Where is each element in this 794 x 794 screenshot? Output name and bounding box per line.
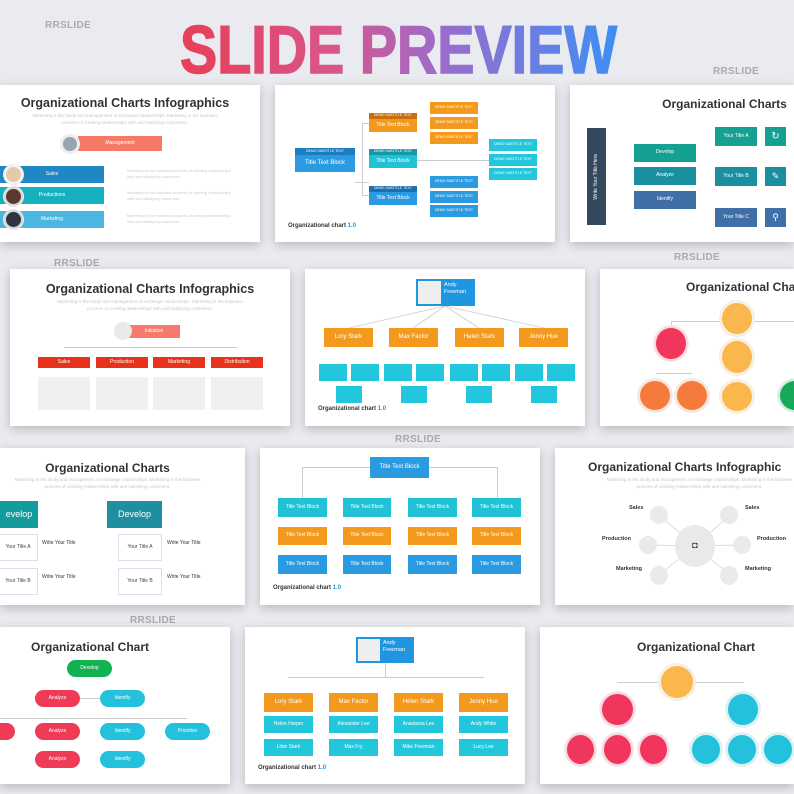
grid: Title Text Block — [350, 561, 384, 567]
your titles: ✎ — [772, 171, 779, 181]
text block: Marketing is the study and management of exchange relationships. Marketing is the business — [57, 299, 243, 304]
productions bar — [0, 187, 104, 204]
andy box — [356, 637, 414, 663]
text block: process of creating relationships with and satisfying customers. — [87, 306, 213, 311]
text block — [607, 477, 792, 489]
watermark: RRSLIDE — [45, 20, 91, 31]
panel: slide 12 circle tree — [540, 627, 794, 784]
identify — [634, 191, 696, 209]
title boxes: Write Your Title — [167, 574, 201, 580]
center circle — [675, 525, 715, 567]
grid: Title Text Block — [416, 561, 449, 567]
title boxes: Your Title B — [127, 578, 153, 584]
pills: Analyze — [49, 695, 66, 701]
heading: Organizational Charts — [45, 461, 170, 475]
text block — [57, 299, 243, 311]
orange column: DEMO SUBTITLE TEXT — [435, 105, 473, 109]
your titles: Your Title C — [723, 214, 749, 220]
grid: Title Text Block — [480, 532, 513, 538]
grid: Title Text Block — [416, 504, 449, 510]
your titles: Your Title B — [723, 173, 749, 179]
title boxes: Your Title A — [127, 544, 153, 550]
title boxes: Write Your Title — [167, 540, 201, 546]
orange mid block: Title Text Block — [376, 122, 410, 128]
your titles: ⚲ — [772, 212, 779, 222]
cyan boxes: Lilon Stark — [277, 744, 300, 750]
your titles: Your Title A — [723, 133, 749, 139]
cyan boxes: Lucy Lee — [473, 744, 494, 750]
yellow circles — [719, 300, 755, 414]
red bars: Sales — [58, 359, 70, 365]
panel: slide 6 circles — [600, 269, 794, 426]
cyan column: DEMO SUBTITLE TEXT — [494, 142, 532, 146]
pills — [0, 690, 210, 768]
grid: Title Text Block — [480, 504, 513, 510]
cyan column: DEMO SUBTITLE TEXT — [494, 171, 532, 175]
cyan column — [489, 139, 537, 180]
panel: slide 10 pills — [0, 627, 230, 784]
green pill — [67, 660, 112, 677]
analyze: Analyze — [656, 172, 674, 178]
orange mid block — [369, 113, 417, 132]
panel: slide 1 infographics with avatars — [0, 85, 260, 242]
andy box — [416, 279, 475, 306]
green pill: Develop — [80, 665, 99, 671]
title boxes — [0, 534, 201, 595]
heading: Organizational Charts — [662, 97, 787, 111]
red circle — [654, 326, 688, 361]
grid: Title Text Block — [286, 504, 319, 510]
grid: Title Text Block — [350, 532, 384, 538]
identify: Identify — [657, 196, 673, 202]
title text block — [295, 148, 355, 172]
orange boxes: Lory Stark — [335, 334, 362, 340]
red bars: Marketing — [168, 359, 190, 365]
text block: Marketing is the study and management of exchange relationships. Marketing is the business — [32, 113, 218, 118]
grid — [278, 498, 521, 574]
management bar — [78, 136, 162, 151]
labels: Sales — [629, 505, 643, 511]
labels: Marketing — [616, 566, 642, 572]
cyan boxes: Max Fry — [344, 744, 363, 750]
heading: Organizational Charts Infographic — [588, 460, 781, 474]
orange column — [430, 102, 478, 144]
blue mid block — [369, 186, 417, 205]
sales bar — [0, 166, 104, 183]
descriptions: Marketing is the business process of creating relationships — [127, 190, 231, 195]
orange circles — [637, 378, 710, 413]
cyan boxes: Alexander Lee — [337, 721, 370, 727]
blue column: DEMO SUBTITLE TEXT — [435, 208, 473, 212]
descriptions: with and satisfying customers. — [127, 174, 180, 179]
heading: Organizational Chart — [637, 640, 755, 654]
vertical bar: Write Your Title Here — [593, 154, 599, 199]
avatars — [3, 164, 24, 230]
descriptions — [127, 168, 231, 224]
footer: Organizational chart 1.0 — [258, 765, 326, 771]
text block — [15, 477, 200, 489]
descriptions: with and satisfying customers. — [127, 196, 180, 201]
develop — [634, 144, 696, 162]
panel: slide 7 develop: Develop — [118, 509, 151, 519]
heading: Organizational Charts Infographics — [21, 96, 229, 110]
orange column: DEMO SUBTITLE TEXT — [435, 120, 473, 124]
panel: slide 11 andy freeman list — [245, 627, 525, 784]
text block: Marketing is the study and management of exchange relationships. Marketing is the business — [607, 477, 792, 482]
orange boxes: Lory Stark — [275, 699, 302, 705]
orange boxes: Jenny Hue — [529, 334, 558, 340]
your titles: ↻ — [771, 131, 780, 142]
panel: slide 2 tree chart — [275, 85, 555, 242]
marketing bar — [0, 211, 104, 228]
develop: Develop — [656, 149, 674, 155]
blue mid block: DEMO SUBTITLE TEXT — [374, 186, 412, 190]
andy box: Freeman — [383, 647, 405, 653]
labels — [602, 505, 786, 572]
cyan boxes: Helen Harper — [274, 721, 303, 727]
blue column: DEMO SUBTITLE TEXT — [435, 179, 473, 183]
productions bar: Productions — [39, 192, 65, 198]
develop boxes: evelop — [6, 509, 32, 519]
descriptions: Marketing is the business process of creating relationships — [127, 213, 231, 218]
orange boxes: Jenny Hue — [469, 699, 498, 705]
blue column — [430, 176, 478, 217]
green circle — [778, 379, 794, 412]
red bars — [38, 357, 263, 368]
top block — [370, 457, 429, 478]
pills: Identify — [114, 728, 131, 734]
footer: Organizational chart 1.0 — [273, 585, 341, 591]
title boxes: Your Title B — [5, 578, 31, 584]
andy box: Freeman — [444, 289, 466, 295]
teal mid block: Title Text Block — [376, 158, 410, 164]
red bars: Production — [110, 359, 134, 365]
initiation: Initiation — [145, 328, 163, 334]
pills: Identify — [114, 695, 131, 701]
grid: Title Text Block — [416, 532, 449, 538]
title text block: Title Text Block — [305, 160, 345, 166]
cyan boxes — [319, 364, 575, 403]
cyan boxes: Andy White — [471, 721, 496, 727]
title boxes: Write Your Title — [42, 574, 76, 580]
red circle — [600, 692, 635, 727]
cyan boxes: Anastasia Lee — [403, 721, 434, 727]
labels: Sales — [745, 505, 759, 511]
analyze — [634, 167, 696, 185]
watermark: RRSLIDE — [674, 252, 720, 263]
orange boxes: Max Factor — [338, 699, 368, 705]
watermark: RRSLIDE — [130, 615, 176, 626]
text block: Marketing is the study and management of exchange relationships. Marketing is the business — [15, 477, 200, 482]
avatar — [61, 135, 79, 153]
pills: Analyze — [49, 728, 66, 734]
panel: slide 5 andy freeman — [305, 269, 585, 426]
andy box: Andy — [444, 282, 457, 288]
red bars: Distribution — [224, 359, 250, 365]
orange boxes: Helen Stark — [464, 334, 495, 340]
labels: Production — [757, 536, 786, 542]
grid: Title Text Block — [480, 561, 513, 567]
grid: Title Text Block — [350, 504, 384, 510]
develop boxes — [0, 501, 38, 528]
grid: Title Text Block — [286, 532, 319, 538]
footer: Organizational chart 1.0 — [318, 406, 386, 412]
management bar: Management — [105, 140, 135, 146]
labels: Production — [602, 536, 631, 542]
marketing bar: Marketing — [41, 216, 63, 222]
title boxes: Write Your Title — [42, 540, 76, 546]
andy box: Andy — [383, 640, 396, 646]
panel: slide 9 radial — [555, 448, 794, 605]
orange column: DEMO SUBTITLE TEXT — [435, 135, 473, 139]
pills: Identify — [114, 756, 131, 762]
watermark: RRSLIDE — [713, 66, 759, 77]
teal mid block — [369, 149, 417, 168]
labels: Marketing — [745, 566, 771, 572]
bottom circles — [564, 732, 794, 767]
cyan circle — [726, 692, 760, 727]
cyan column: DEMO SUBTITLE TEXT — [494, 157, 532, 161]
text block: process of creating relationships with and satisfying customers. — [637, 484, 762, 489]
teal mid block: DEMO SUBTITLE TEXT — [374, 149, 412, 153]
descriptions: with and satisfying customers. — [127, 219, 180, 224]
top block: Title Text Block — [379, 464, 420, 470]
small circles — [639, 506, 751, 585]
orange boxes: Max Factor — [398, 334, 428, 340]
title boxes: Your Title A — [5, 544, 31, 550]
pills: Analyze — [49, 756, 66, 762]
orange boxes — [324, 328, 568, 347]
watermark: RRSLIDE — [395, 434, 441, 445]
gray boxes — [38, 377, 263, 410]
grid: Title Text Block — [286, 561, 319, 567]
sales bar: Sales — [46, 171, 58, 177]
watermark: RRSLIDE — [54, 258, 100, 269]
title text block: DEMO SUBTITLE TEXT — [306, 149, 344, 153]
your titles — [715, 127, 786, 227]
footer: Organizational chart 1.0 — [288, 223, 356, 229]
text block — [32, 113, 218, 125]
orange boxes — [264, 693, 508, 712]
descriptions: Marketing is the business process of creating relationships — [127, 168, 231, 173]
text block: process of creating relationships with and satisfying customers. — [62, 120, 188, 125]
blue mid block: Title Text Block — [376, 195, 410, 201]
panel: slide 7 develop — [0, 448, 245, 605]
pills: Prioritize — [178, 728, 197, 734]
orange boxes: Helen Stark — [403, 699, 434, 705]
panel: slide 8 grid chart — [260, 448, 540, 605]
cyan boxes — [264, 716, 508, 756]
heading: Organizational Charts Infographics — [46, 282, 254, 296]
center circle: ◘ — [692, 540, 698, 550]
blue column: DEMO SUBTITLE TEXT — [435, 194, 473, 198]
heading: Organizational Chart — [31, 640, 149, 654]
cyan boxes: Mike Freeman — [403, 744, 434, 750]
panel: slide 4 initiation — [10, 269, 290, 426]
orange mid block: DEMO SUBTITLE TEXT — [374, 113, 412, 117]
vertical bar — [587, 128, 606, 225]
text block: process of creating relationships with and satisfying customers. — [45, 484, 170, 489]
panel: slide 3 develop analyze identify — [570, 85, 794, 242]
yellow circle — [659, 664, 695, 700]
initiation — [114, 322, 180, 340]
